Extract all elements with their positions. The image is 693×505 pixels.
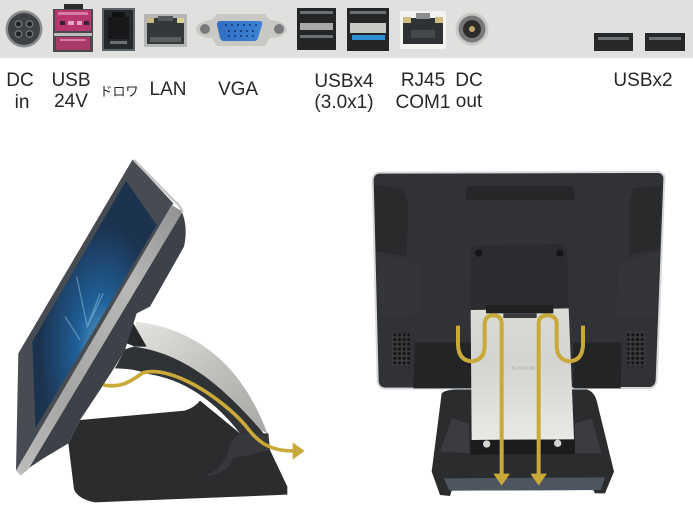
brand mark on plate: BUSICOM [512, 365, 535, 371]
icon: LAN port [144, 14, 187, 47]
plate bottom recess [470, 439, 575, 455]
stand hinge [127, 323, 147, 347]
monitor rear housing [28, 212, 186, 468]
icon: VGA port [196, 14, 287, 46]
rear view of terminal [373, 172, 664, 496]
icon: DC out jack [456, 12, 488, 46]
left grip panel [377, 252, 422, 318]
label: USBx4 (3.0x1): USBx4 [314, 71, 374, 92]
label: USBx4 (3.0x1) [314, 71, 374, 113]
left vent [392, 333, 410, 367]
stand foot [203, 433, 270, 476]
label: RJ45 COM1: COM1 [396, 92, 450, 113]
silver band [16, 205, 183, 475]
label: DC out: out [456, 91, 483, 112]
base [68, 401, 287, 502]
lower rear panels [413, 343, 622, 388]
icon: DC in port [6, 10, 42, 48]
front bezel [16, 159, 173, 471]
label: DC in [6, 70, 34, 113]
yellow cable arrow [103, 372, 305, 460]
icon: USB stack 1 [297, 8, 336, 50]
base front strip [444, 477, 605, 491]
label: DC in: DC [6, 70, 34, 91]
side view of terminal [16, 159, 305, 502]
yellow cable arrows [458, 315, 583, 486]
top edge [134, 160, 183, 212]
icon: USB port right 1 [594, 33, 633, 51]
label: USB 24V: 24V [54, 91, 88, 112]
label: DC in: in [15, 92, 29, 113]
label: USBx2: USBx2 [613, 70, 673, 91]
port strip background [0, 0, 693, 58]
label: USB 24V [51, 70, 91, 112]
base side supports [440, 418, 602, 453]
icon: drawer port [102, 8, 135, 51]
label: drawer: ドロワ [99, 84, 139, 99]
right side dark strip [629, 185, 662, 255]
hinge [471, 244, 568, 310]
label: USB 24V: USB [51, 70, 91, 91]
stand arc [133, 322, 267, 433]
screws [483, 440, 490, 448]
stand arm [115, 347, 265, 435]
label: LAN: LAN [150, 79, 186, 100]
label: DC out: DC [455, 70, 483, 91]
label: USBx4 (3.0x1): (3.0x1) [314, 92, 374, 113]
icon: USB port right 2 [645, 33, 685, 51]
left side dark strip [374, 185, 408, 257]
right grip panel [617, 252, 658, 318]
monitor back [373, 172, 664, 389]
label: RJ45 COM1: RJ45 [401, 70, 445, 91]
screen [32, 181, 157, 428]
icon: USB 24V port [53, 4, 93, 52]
stand base [432, 389, 614, 496]
label: DC out [455, 70, 483, 112]
icon: RJ45 COM port [400, 11, 446, 49]
top cover [465, 186, 575, 200]
label: RJ45 COM1 [396, 70, 450, 113]
right vent [627, 332, 645, 367]
label: VGA: VGA [218, 79, 258, 100]
icon: USB stack 2 with USB 3.0 [347, 8, 389, 51]
silver plate [471, 308, 574, 440]
